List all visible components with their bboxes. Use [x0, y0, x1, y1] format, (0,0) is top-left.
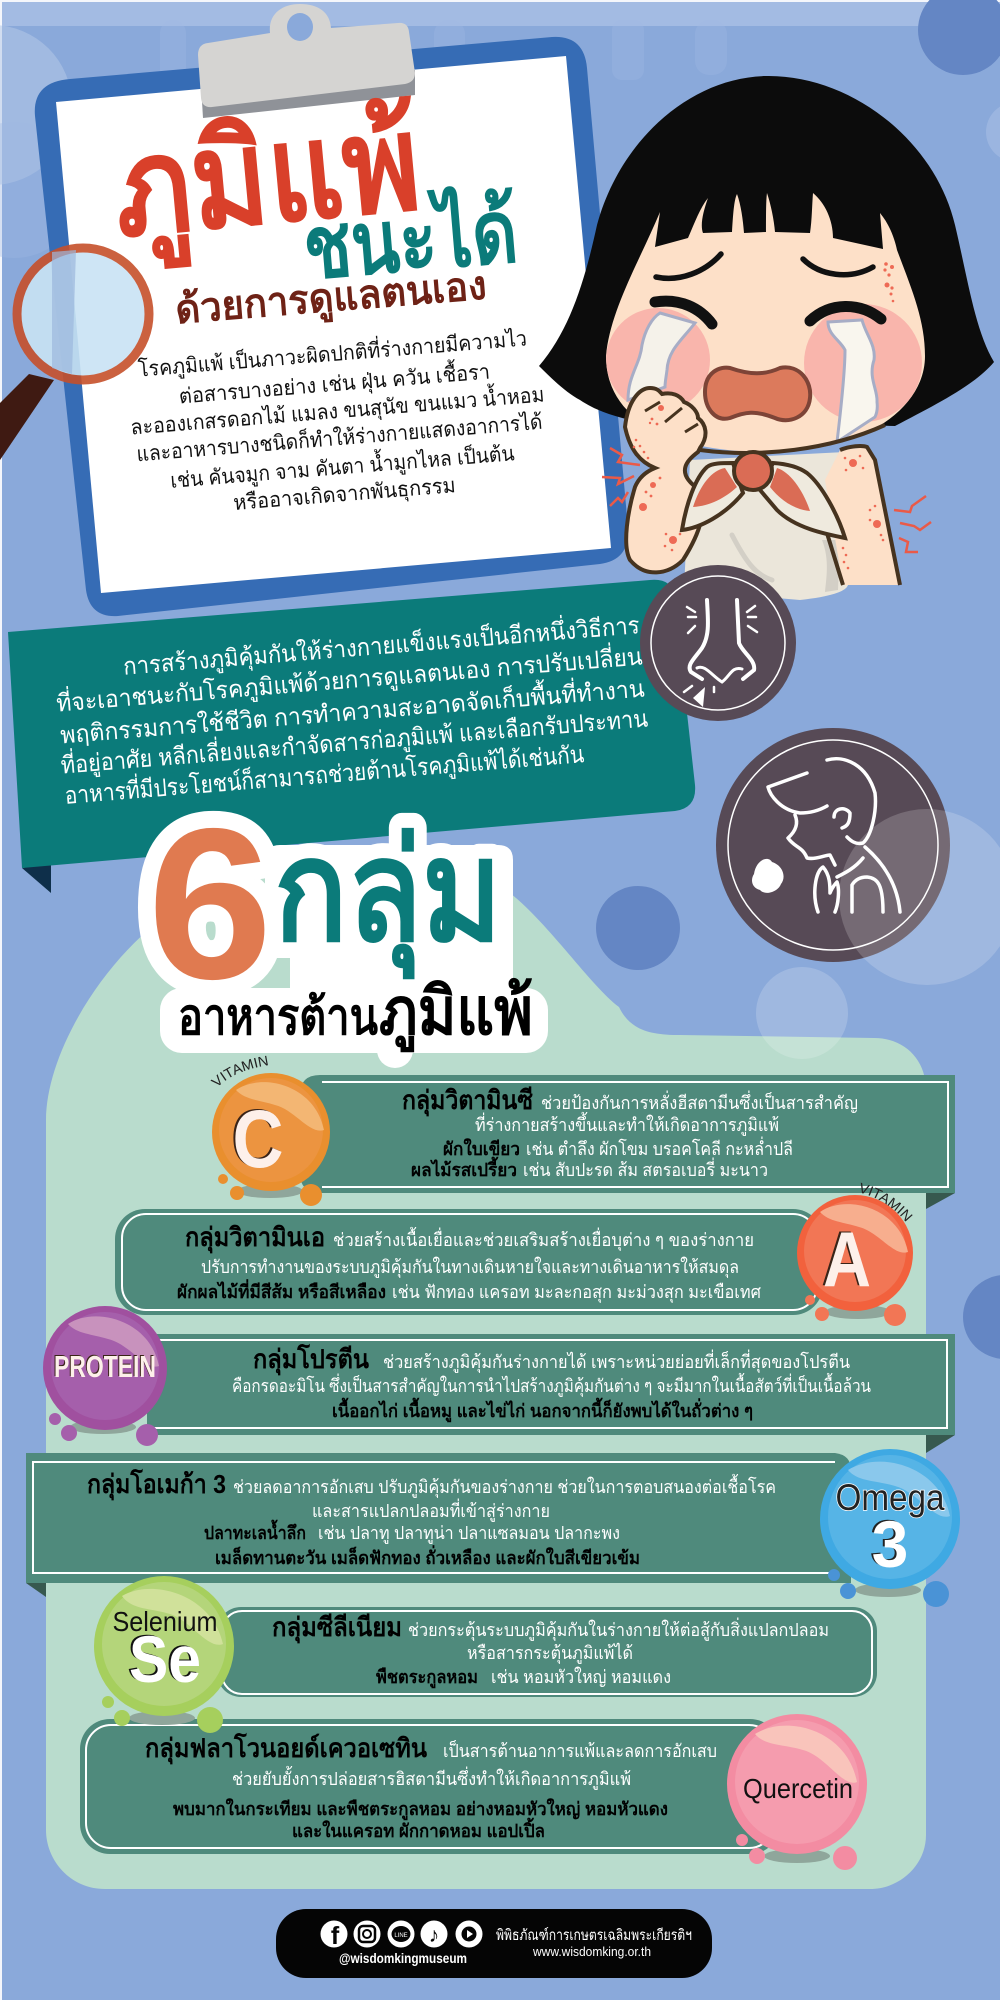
icon: nose — [640, 565, 796, 721]
intro text block — [129, 323, 545, 516]
badge: vitamin C: C — [232, 1094, 284, 1185]
banner text: ที่จะเอาชนะกับโรคภูมิแพ้ด้วยการดูแลตนเอง การปรับเปลี่ยน — [55, 640, 644, 719]
badge: vitamin A: VITAMIN — [860, 1182, 913, 1222]
mouth — [705, 367, 810, 420]
intro text block: โรคภูมิแพ้ เป็นภาวะผิดปกติที่ร่างกายมีความไว — [137, 323, 528, 383]
badge: omega 3 — [820, 1449, 960, 1607]
badge: omega 3: Omega — [836, 1477, 945, 1518]
heading: 6 groups — [148, 783, 513, 1024]
panel: quercetin: เป็นสารต้านอาการแพ้และลดการอักเสบ — [443, 1739, 717, 1761]
scarf — [682, 452, 845, 538]
badge: quercetin: Quercetin — [743, 1773, 853, 1804]
panel: vitamin C: กลุ่มวิตามินซี — [402, 1085, 533, 1117]
chin line — [700, 425, 885, 453]
left arm and fist — [625, 388, 706, 572]
panel: protein — [147, 1334, 955, 1453]
panel: selenium: เช่น หอมหัวใหญ่ หอมแดง — [491, 1666, 671, 1687]
heading: 6 groups: กลุ่ม — [274, 812, 502, 980]
badge: protein: PROTEIN — [54, 1349, 156, 1384]
heading: foods against allergy: ภูมิแพ้ — [379, 974, 533, 1053]
icon: magnifying glass — [0, 248, 149, 460]
dress — [684, 452, 848, 600]
badge: vitamin A: A — [823, 1215, 871, 1303]
badge: selenium: Se — [129, 1622, 201, 1696]
panel: selenium: กลุ่มซีลีเนียม — [272, 1612, 402, 1644]
banner text: พฤติกรรมการใช้ชีวิต การทำความสะอาดจัดเก็บพื้นที่ทำงาน — [59, 671, 646, 749]
badge: selenium: Se — [127, 1621, 199, 1695]
panel: vitamin A: ผักผลไม้ที่มีสีส้ม หรือสีเหลือง — [177, 1279, 386, 1302]
icon: social row: LINE — [394, 1933, 408, 1939]
badge: vitamin C: C — [230, 1093, 282, 1184]
icon: social row: f — [331, 1922, 340, 1950]
panel: vitamin C: เช่น สับปะรด ส้ม สตรอเบอรี่ มะนาว — [523, 1157, 768, 1180]
title: ชนะได้: ชนะได้ — [300, 181, 521, 298]
heading: foods against allergy — [160, 974, 548, 1068]
panel: quercetin: กลุ่มฟลาโวนอยด์เควอเซทิน — [145, 1732, 427, 1765]
intro text block: ละอองเกสรดอกไม้ แมลง ขนสุนัข ขนแมว น้ำหอม — [129, 379, 545, 441]
badge: protein — [43, 1306, 167, 1446]
badge: vitamin A: A — [821, 1214, 869, 1302]
panel: omega 3: ปลาทะเลน้ำลึก — [204, 1519, 306, 1543]
panel: quercetin: และในแครอท ผักกาดหอม แอปเปิ้ล — [292, 1817, 545, 1841]
paper — [56, 56, 611, 593]
clipboard — [35, 4, 628, 616]
cheeks — [606, 304, 922, 422]
badge: selenium: Selenium — [112, 1606, 218, 1637]
badge: protein: PROTEIN — [53, 1348, 155, 1383]
panel: vitamin A: กลุ่มวิตามินเอ — [185, 1222, 325, 1254]
banner text — [55, 608, 649, 811]
panel: vitamin C: ช่วยป้องกันการหลั่งฮีสตามีนซึ่งเป็นสารสำคัญ — [541, 1090, 858, 1113]
itch marks — [602, 448, 931, 552]
eyes — [655, 301, 712, 324]
icon: social row: ♪ — [429, 1924, 439, 1947]
intro text block: เช่น คันจมูก จาม คันตา น้ำมูกไหล เป็นต้น — [169, 438, 515, 494]
footer — [276, 1909, 712, 1978]
heading: 6 groups: 6 — [148, 783, 272, 1024]
footer: @wisdomkingmuseum — [339, 1950, 467, 1966]
panel: selenium: ช่วยกระตุ้นระบบภูมิคุ้มกันในร่างกายให้ต่อสู้กับสิ่งแปลกปลอม — [408, 1617, 829, 1641]
badge: omega 3: 3 — [870, 1506, 906, 1580]
icon: social row — [320, 1920, 482, 1950]
footer: www.wisdomking.or.th — [532, 1944, 651, 1959]
face — [606, 193, 925, 452]
badge: vitamin C: VITAMIN — [210, 1056, 268, 1086]
brows — [656, 254, 721, 278]
title: ภูมิแพ้: ภูมิแพ้ — [108, 88, 427, 274]
panel: protein: คือกรดอะมิโน ซึ่งเป็นสารสำคัญในการนำไปสร้างภูมิคุ้มกันต่าง ๆ จะมีมากในเนื้อสัตว์ที่เป็นเนื้อล้วน — [232, 1373, 871, 1397]
right arm — [825, 447, 900, 585]
panel: protein: เนื้ออกไก่ เนื้อหมู และไข่ไก่ นอกจากนี้ก็ยังพบได้ในถั่วต่าง ๆ — [332, 1397, 753, 1423]
panel: selenium: พืชตระกูลหอม — [376, 1667, 478, 1689]
panel: vitamin A: เช่น ฟักทอง แครอท มะละกอสุก มะม่วงสุก มะเขือเทศ — [392, 1282, 762, 1303]
panel: vitamin C: ผลไม้รสเปรี้ยว — [411, 1156, 517, 1180]
badge: quercetin — [727, 1714, 867, 1870]
panel: vitamin C: ผักใบเขียว — [443, 1138, 520, 1159]
banner text: ที่อยู่อาศัย หลีกเลี่ยงและกำจัดสารก่อภูมิแพ้ และเลือกรับประทาน — [59, 701, 649, 781]
panel: vitamin A — [115, 1209, 823, 1315]
panel: omega 3: เมล็ดทานตะวัน เมล็ดฟักทอง ถั่วเหลือง และผักใบสีเขียวเข้ม — [215, 1545, 640, 1568]
panel: quercetin — [80, 1719, 780, 1854]
clip — [198, 4, 415, 118]
panel: vitamin C — [300, 1075, 955, 1209]
banner text: อาหารที่มีประโยชน์ก็สามารถช่วยต้านโรคภูมิแพ้ได้เช่นกัน — [63, 737, 585, 811]
heading: foods against allergy: อาหารต้าน — [178, 989, 378, 1045]
panel: omega 3: เช่น ปลาทู ปลาทูน่า ปลาแซลมอน ปลากะพง — [318, 1523, 620, 1544]
teal banner — [8, 580, 695, 893]
tears — [628, 313, 695, 400]
panel: omega 3 — [26, 1453, 851, 1597]
subtitle: ด้วยการดูแลตนเอง — [174, 264, 488, 334]
panel: omega 3: ช่วยลดอาการอักเสบ ปรับภูมิคุ้มกันของร่างกาย ช่วยในการตอบสนองต่อเชื้อโรค — [233, 1474, 776, 1498]
panel: selenium — [217, 1607, 877, 1697]
panel: quercetin: ช่วยยับยั้งการปล่อยสารฮิสตามีนซึ่งทำให้เกิดอาการภูมิแพ้ — [232, 1766, 631, 1790]
pale bubbles — [756, 809, 1000, 1059]
panel: vitamin C: เช่น ตำลึง ผักโขม บรอคโคลี กะหล่ำปลี — [526, 1136, 793, 1159]
panel: omega 3: และสารแปลกปลอมที่เข้าสู่ร่างกาย — [312, 1498, 550, 1522]
intro text block: และอาหารบางชนิดก็ทำให้ร่างกายแสดงอาการได้ — [135, 408, 543, 466]
panel: omega 3: กลุ่มโอเมก้า 3 — [87, 1468, 226, 1501]
panel: vitamin A: ปรับการทำงานของระบบภูมิคุ้มกันในทางเดินหายใจและทางเดินอาหารให้สมดุล — [201, 1256, 739, 1278]
badge: selenium — [94, 1576, 234, 1733]
rash dots — [633, 262, 894, 569]
panel: selenium: หรือสารกระตุ้นภูมิแพ้ได้ — [467, 1642, 633, 1664]
footer: พิพิธภัณฑ์การเกษตรเฉลิมพระเกียรติฯ — [496, 1927, 692, 1944]
badge: vitamin C — [210, 1056, 330, 1206]
illustration: crying girl — [539, 76, 994, 600]
panel: vitamin A: ช่วยสร้างเนื้อเยื่อและช่วยเสริมสร้างเยื่อบุต่าง ๆ ของร่างกาย — [333, 1227, 754, 1251]
banner text: การสร้างภูมิคุ้มกันให้ร่างกายแข็งแรงเป็นอีกหนึ่งวิธีการ — [122, 608, 641, 682]
heading: 6 groups: กลุ่ม — [274, 812, 502, 980]
panel: vitamin C: ที่ร่างกายสร้างขึ้นและทำให้เกิดอาการภูมิแพ้ — [475, 1112, 779, 1136]
intro text block: ต่อสารบางอย่าง เช่น ฝุ่น ควัน เชื้อรา — [178, 357, 491, 409]
badge: vitamin A — [797, 1182, 913, 1326]
badge: omega 3: 3 — [872, 1507, 908, 1581]
panel: quercetin: พบมากในกระเทียม และพืชตระกูลหอม อย่างหอมหัวใหญ่ หอมหัวแดง — [173, 1798, 668, 1821]
heading: 6 groups: 6 — [148, 783, 272, 1024]
icon: coughing person — [716, 728, 950, 962]
panel: protein: ช่วยสร้างภูมิคุ้มกันร่างกายได้ เพราะหน่วยย่อยที่เล็กที่สุดของโปรตีน — [383, 1349, 850, 1373]
panel: protein: กลุ่มโปรตีน — [253, 1343, 369, 1376]
mint panel — [46, 863, 926, 1889]
intro text block: หรืออาจเกิดจากพันธุกรรม — [232, 474, 457, 516]
